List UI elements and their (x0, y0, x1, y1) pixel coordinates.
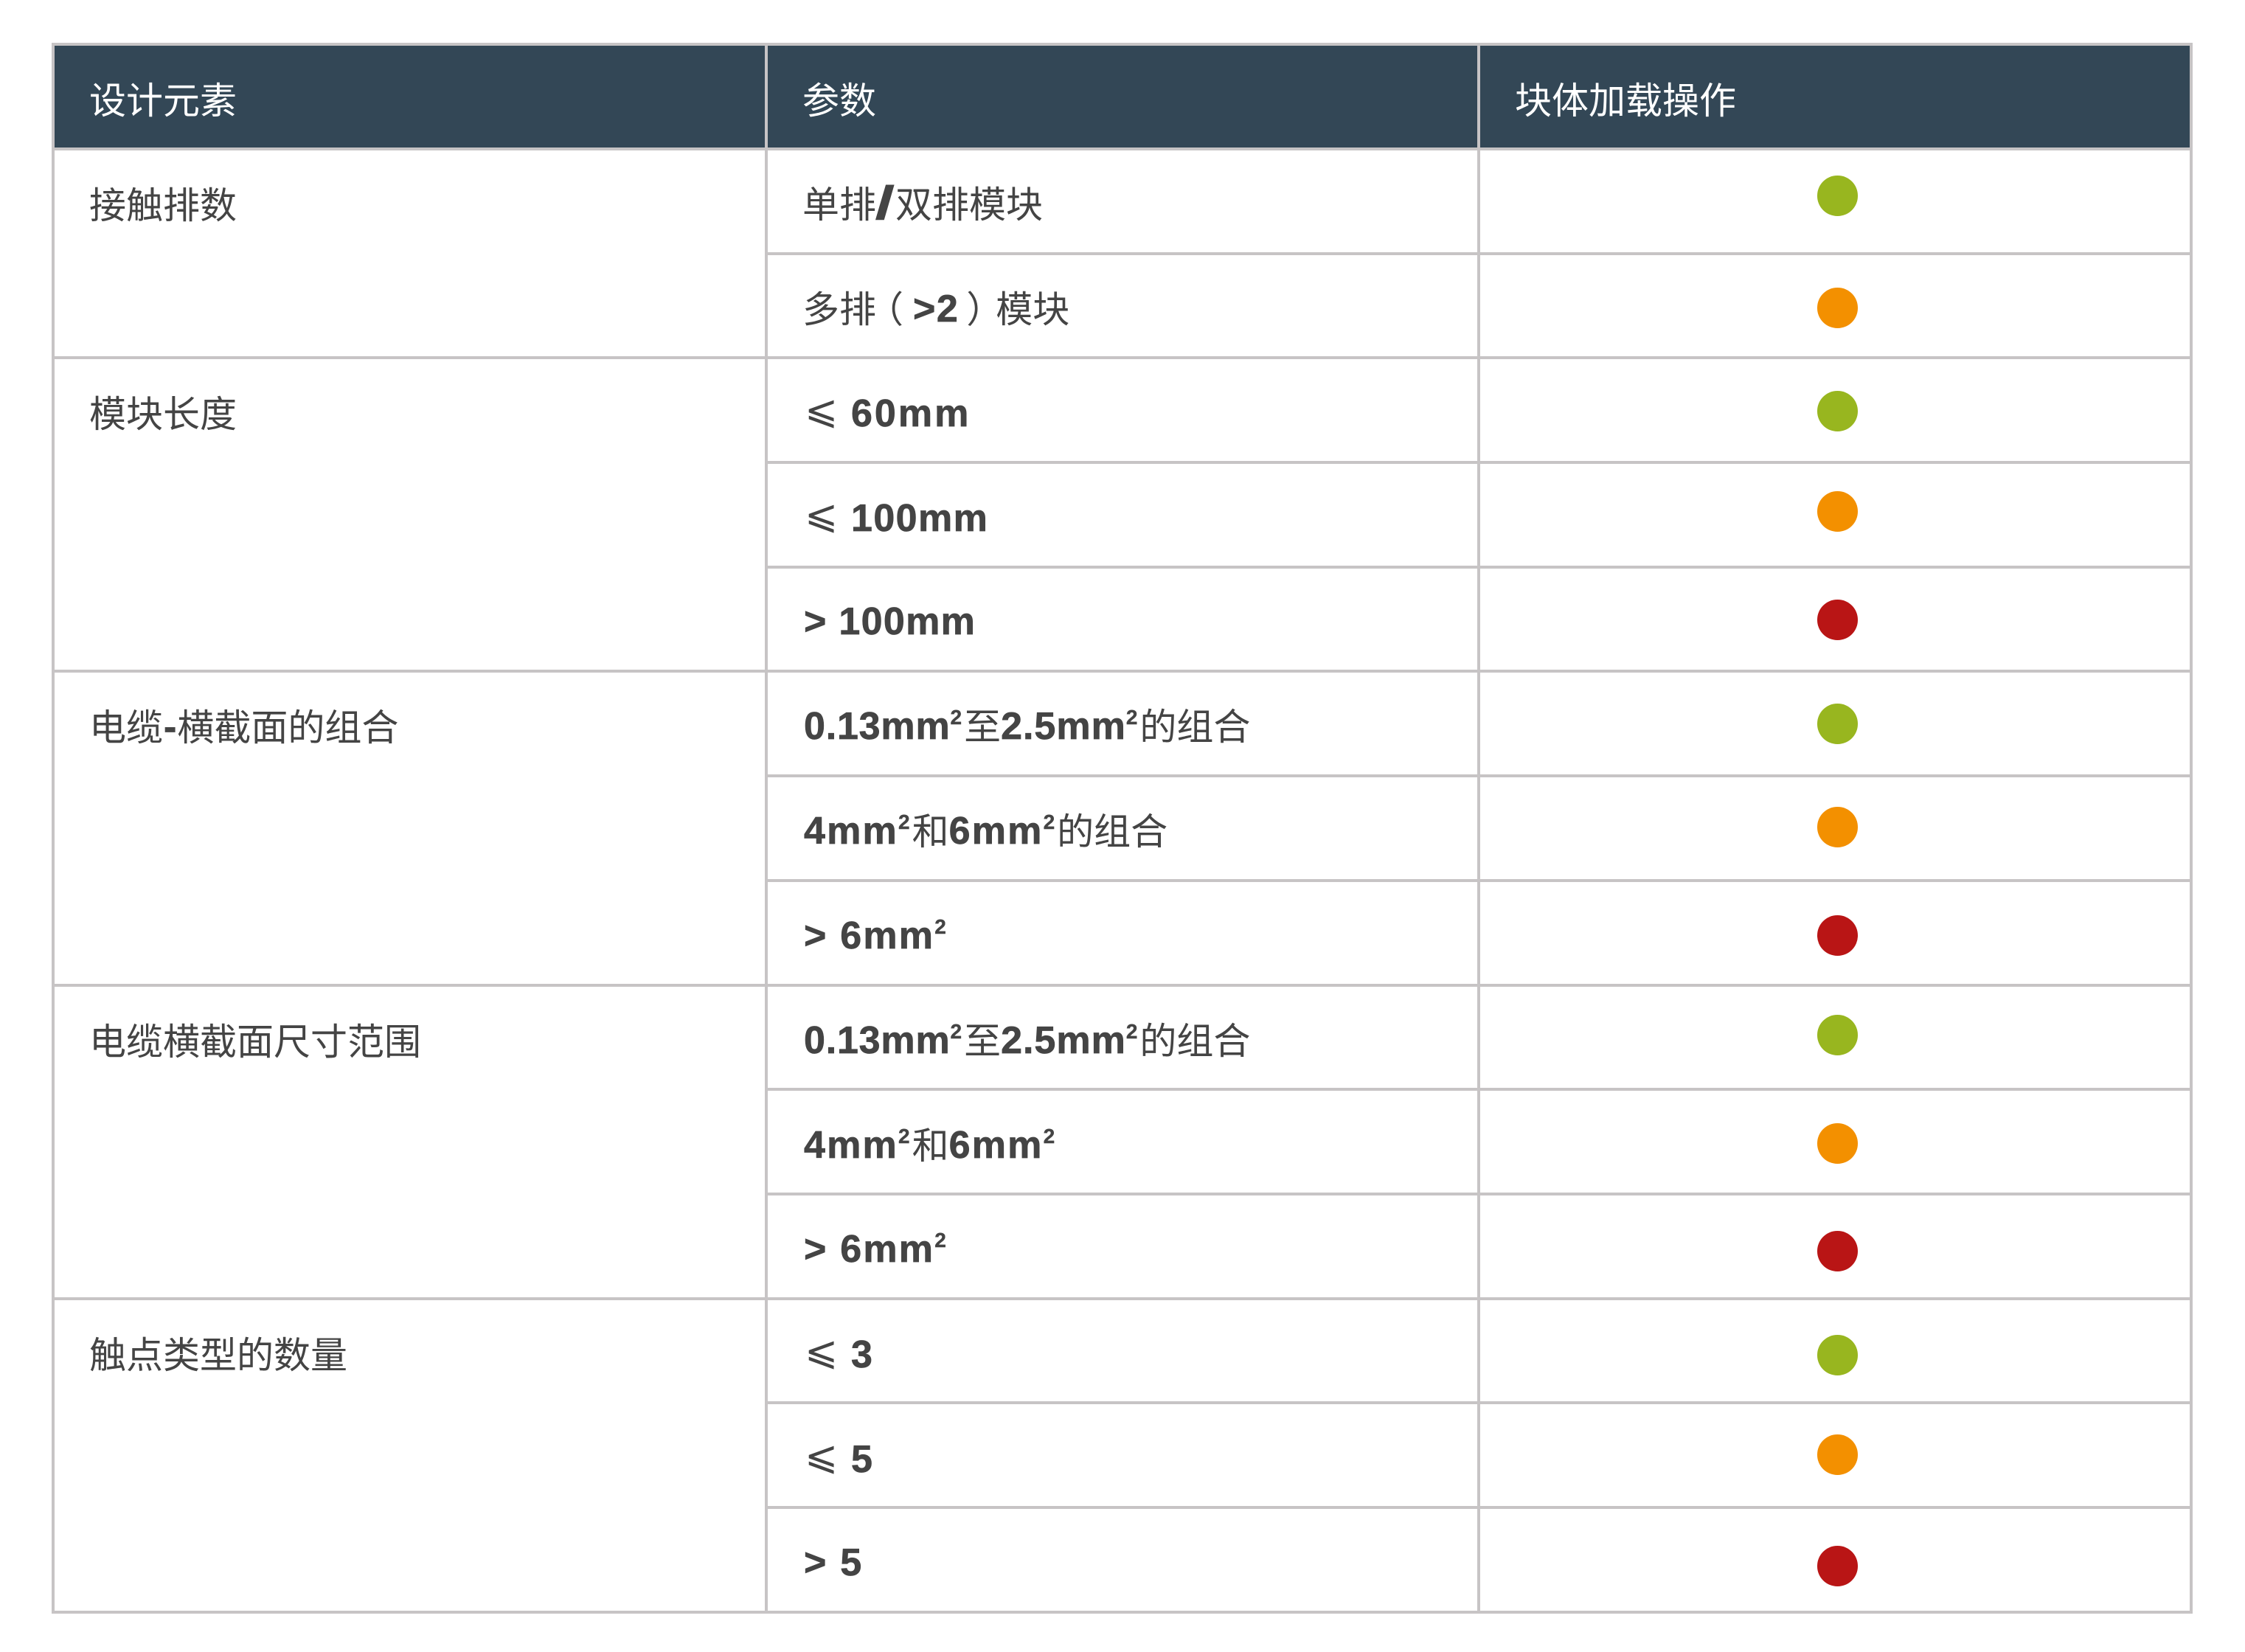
status dot: red (1817, 600, 1857, 640)
parameter text (805, 386, 971, 435)
group: contact rows (89, 176, 1858, 330)
label: module length: 模块长度 (89, 394, 237, 435)
parameter text (805, 1432, 874, 1481)
header row (52, 43, 2193, 150)
header: block loading operation: 块体加载操作 (1515, 80, 1736, 122)
status dot: green (1817, 704, 1857, 743)
parameter text: > 100mm (804, 600, 976, 643)
label: contact rows: 接触排数 (89, 185, 237, 226)
parameter text (805, 1328, 874, 1376)
group: cable cross-section size range (89, 1015, 1858, 1271)
parameter text: 4mm2和6mm2 (804, 1124, 1057, 1167)
status dot: red (1817, 1231, 1857, 1271)
header: design element: 设计元素 (89, 80, 237, 122)
row: up to 3 (805, 1328, 1858, 1376)
parameter text: 0.13mm2至2.5mm2的组合 (804, 705, 1250, 748)
row: 4 and 6 combination (804, 807, 1858, 853)
status dot: green (1817, 391, 1857, 431)
parameter text (805, 491, 988, 540)
parameter text: ⩽ (805, 386, 838, 433)
parameter text: ⩽ (805, 1328, 838, 1374)
row: multi row (802, 288, 1858, 330)
row: single or double row (802, 176, 1858, 229)
parameter text: 3 (851, 1333, 874, 1376)
status dot: orange (1817, 491, 1857, 531)
status dot: orange (1817, 807, 1857, 847)
status dot: green (1817, 1015, 1857, 1055)
row: up to 5 (805, 1432, 1858, 1481)
status dot: red (1817, 1546, 1857, 1586)
status dot: orange (1817, 1123, 1857, 1164)
status dot: orange (1817, 288, 1857, 327)
label: cable cross-section size range: 电缆横截面尺寸范围 (89, 1021, 421, 1063)
parameter text: > 6mm2 (804, 914, 948, 957)
status dot: orange (1817, 1434, 1857, 1475)
status dot: green (1817, 176, 1857, 215)
parameter text: ⩽ (805, 1432, 838, 1479)
row: over 6 (804, 1228, 1858, 1271)
group: module length (89, 386, 1858, 643)
parameter text: > 6mm2 (804, 1228, 948, 1271)
status dot: red (1817, 915, 1857, 956)
parameter text: 单排 双排模块 (802, 184, 1043, 226)
group: number of contact types (89, 1328, 1858, 1586)
header: parameter: 参数 (802, 80, 876, 122)
parameter text: 60mm (851, 392, 971, 435)
parameter text: 100mm (851, 497, 988, 540)
label: cable cross-section combination: 电缆-横截面的组合 (89, 706, 398, 749)
parameter text: ⩽ (805, 491, 838, 538)
row: 4 and 6 (804, 1123, 1858, 1167)
row: 0.13 to 2.5 combination (804, 704, 1858, 748)
parameter text: 多排（>2）模块 (802, 288, 1069, 330)
row: up to 60mm (805, 386, 1858, 435)
row: over 100mm (804, 600, 1858, 643)
row: over 6 (804, 914, 1858, 957)
row: up to 100mm (805, 491, 1858, 540)
status dot: green (1817, 1335, 1857, 1375)
group: cable cross-section combination (89, 704, 1858, 957)
label: number of contact types: 触点类型的数量 (89, 1335, 347, 1376)
parameter text: / (875, 176, 895, 229)
parameter text: 5 (851, 1438, 874, 1481)
parameter text: > 5 (804, 1541, 863, 1584)
row: 0.13 to 2.5 combination (804, 1015, 1858, 1062)
row: over 5 (804, 1541, 1858, 1586)
parameter text: 0.13mm2至2.5mm2的组合 (804, 1019, 1250, 1062)
parameter text: 4mm2和6mm2的组合 (804, 810, 1167, 853)
